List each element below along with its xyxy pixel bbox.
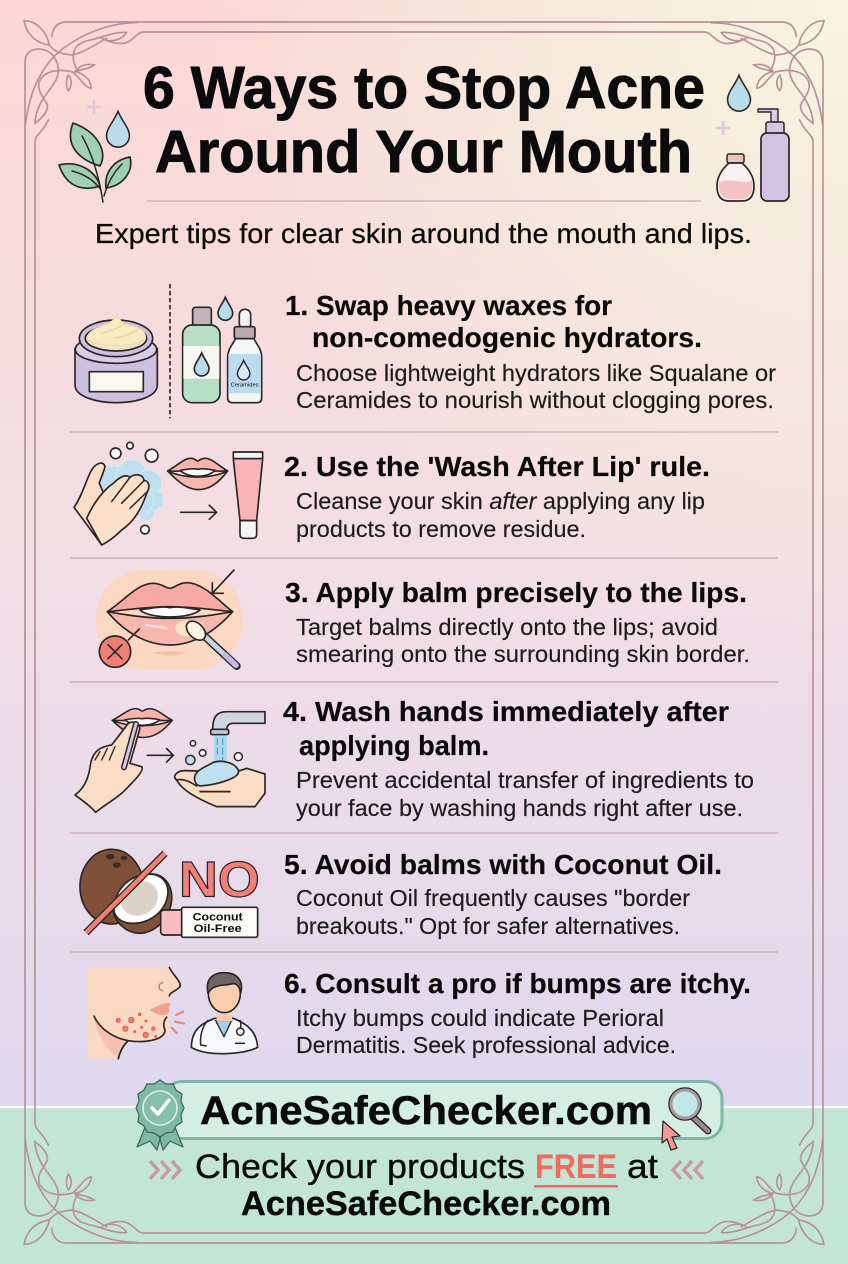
free check line: at [627, 1148, 659, 1186]
icon: cream jar and hydrator bottles [75, 284, 262, 418]
tip 4 [75, 696, 754, 821]
tip 6 [88, 967, 751, 1059]
description: Itchy bumps could indicate Perioral [296, 1005, 664, 1031]
icon: hand applying balm then washing under tap [75, 709, 265, 812]
call to action pill: AcneSafeChecker.com [200, 1089, 652, 1133]
tip 3 [96, 569, 750, 670]
website url: AcneSafeChecker.com [241, 1185, 611, 1223]
description [296, 360, 776, 413]
description [296, 885, 690, 939]
free check line [195, 1148, 659, 1188]
title: 6 Ways to Stop Acne [143, 55, 705, 121]
tip 2 [74, 442, 710, 545]
description: Cleanse your skin after applying any lip [296, 488, 705, 514]
icon: face with bumps and doctor [88, 967, 258, 1059]
title: Around Your Mouth [155, 119, 692, 185]
description: smearing onto the surrounding skin border. [296, 641, 750, 667]
description: products to remove residue. [296, 516, 586, 542]
heading: 1. Swap heavy waxes for [285, 290, 612, 321]
icon: crossed out coconut with NO and coconut-free balm: Oil-Free [194, 923, 242, 935]
description [296, 614, 750, 667]
subtitle: Expert tips for clear skin around the mouth and lips. [95, 218, 752, 249]
icon: washing hands, lips and tube [74, 442, 263, 545]
heading: 2. Use the 'Wash After Lip' rule. [284, 451, 710, 482]
icon: crossed out coconut with NO and coconut-free balm: Coconut [193, 912, 243, 924]
heading line 2: non-comedogenic hydrators. [312, 322, 702, 353]
icon: crossed out coconut with NO and coconut-free balm [80, 849, 260, 937]
tip 5 [80, 849, 722, 939]
description: Prevent accidental transfer of ingredients to [296, 767, 754, 793]
heading: 3. Apply balm precisely to the lips. [285, 577, 747, 608]
icon: drop and bottles [716, 75, 789, 201]
chevrons right [673, 1161, 703, 1179]
icon: balm applied to lips [96, 569, 243, 670]
heading line 2: applying balm. [299, 730, 489, 761]
description: breakouts." Opt for safer alternatives. [296, 913, 680, 939]
icon: cream jar and hydrator bottles: Ceramides [231, 382, 259, 388]
description: Dermatitis. Seek professional advice. [296, 1032, 676, 1058]
free check line: Check your products [195, 1148, 525, 1186]
chevrons left [150, 1161, 180, 1179]
description: Target balms directly onto the lips; avoid [296, 614, 718, 640]
description: Coconut Oil frequently causes "border [296, 885, 690, 911]
description [296, 1005, 676, 1058]
description: Choose lightweight hydrators like Squalane or [296, 360, 776, 386]
icon: plant and water drop [59, 100, 131, 202]
description: Ceramides to nourish without clogging pores. [296, 387, 774, 413]
icon: rosette badge [136, 1080, 184, 1150]
description [296, 488, 705, 542]
heading: 4. Wash hands immediately after [283, 696, 729, 727]
icon: crossed out coconut with NO and coconut-free balm: NO [179, 852, 260, 908]
tip 1 [75, 284, 776, 418]
heading: 6. Consult a pro if bumps are itchy. [284, 968, 751, 999]
heading: 5. Avoid balms with Coconut Oil. [284, 849, 722, 880]
title [143, 55, 705, 185]
call to action pill [165, 1082, 722, 1138]
icon: magnifier and cursor [662, 1088, 708, 1150]
description [296, 767, 754, 821]
title divider [147, 200, 701, 202]
free check line: FREE [535, 1148, 617, 1186]
description: your face by washing hands right after use. [296, 795, 743, 821]
